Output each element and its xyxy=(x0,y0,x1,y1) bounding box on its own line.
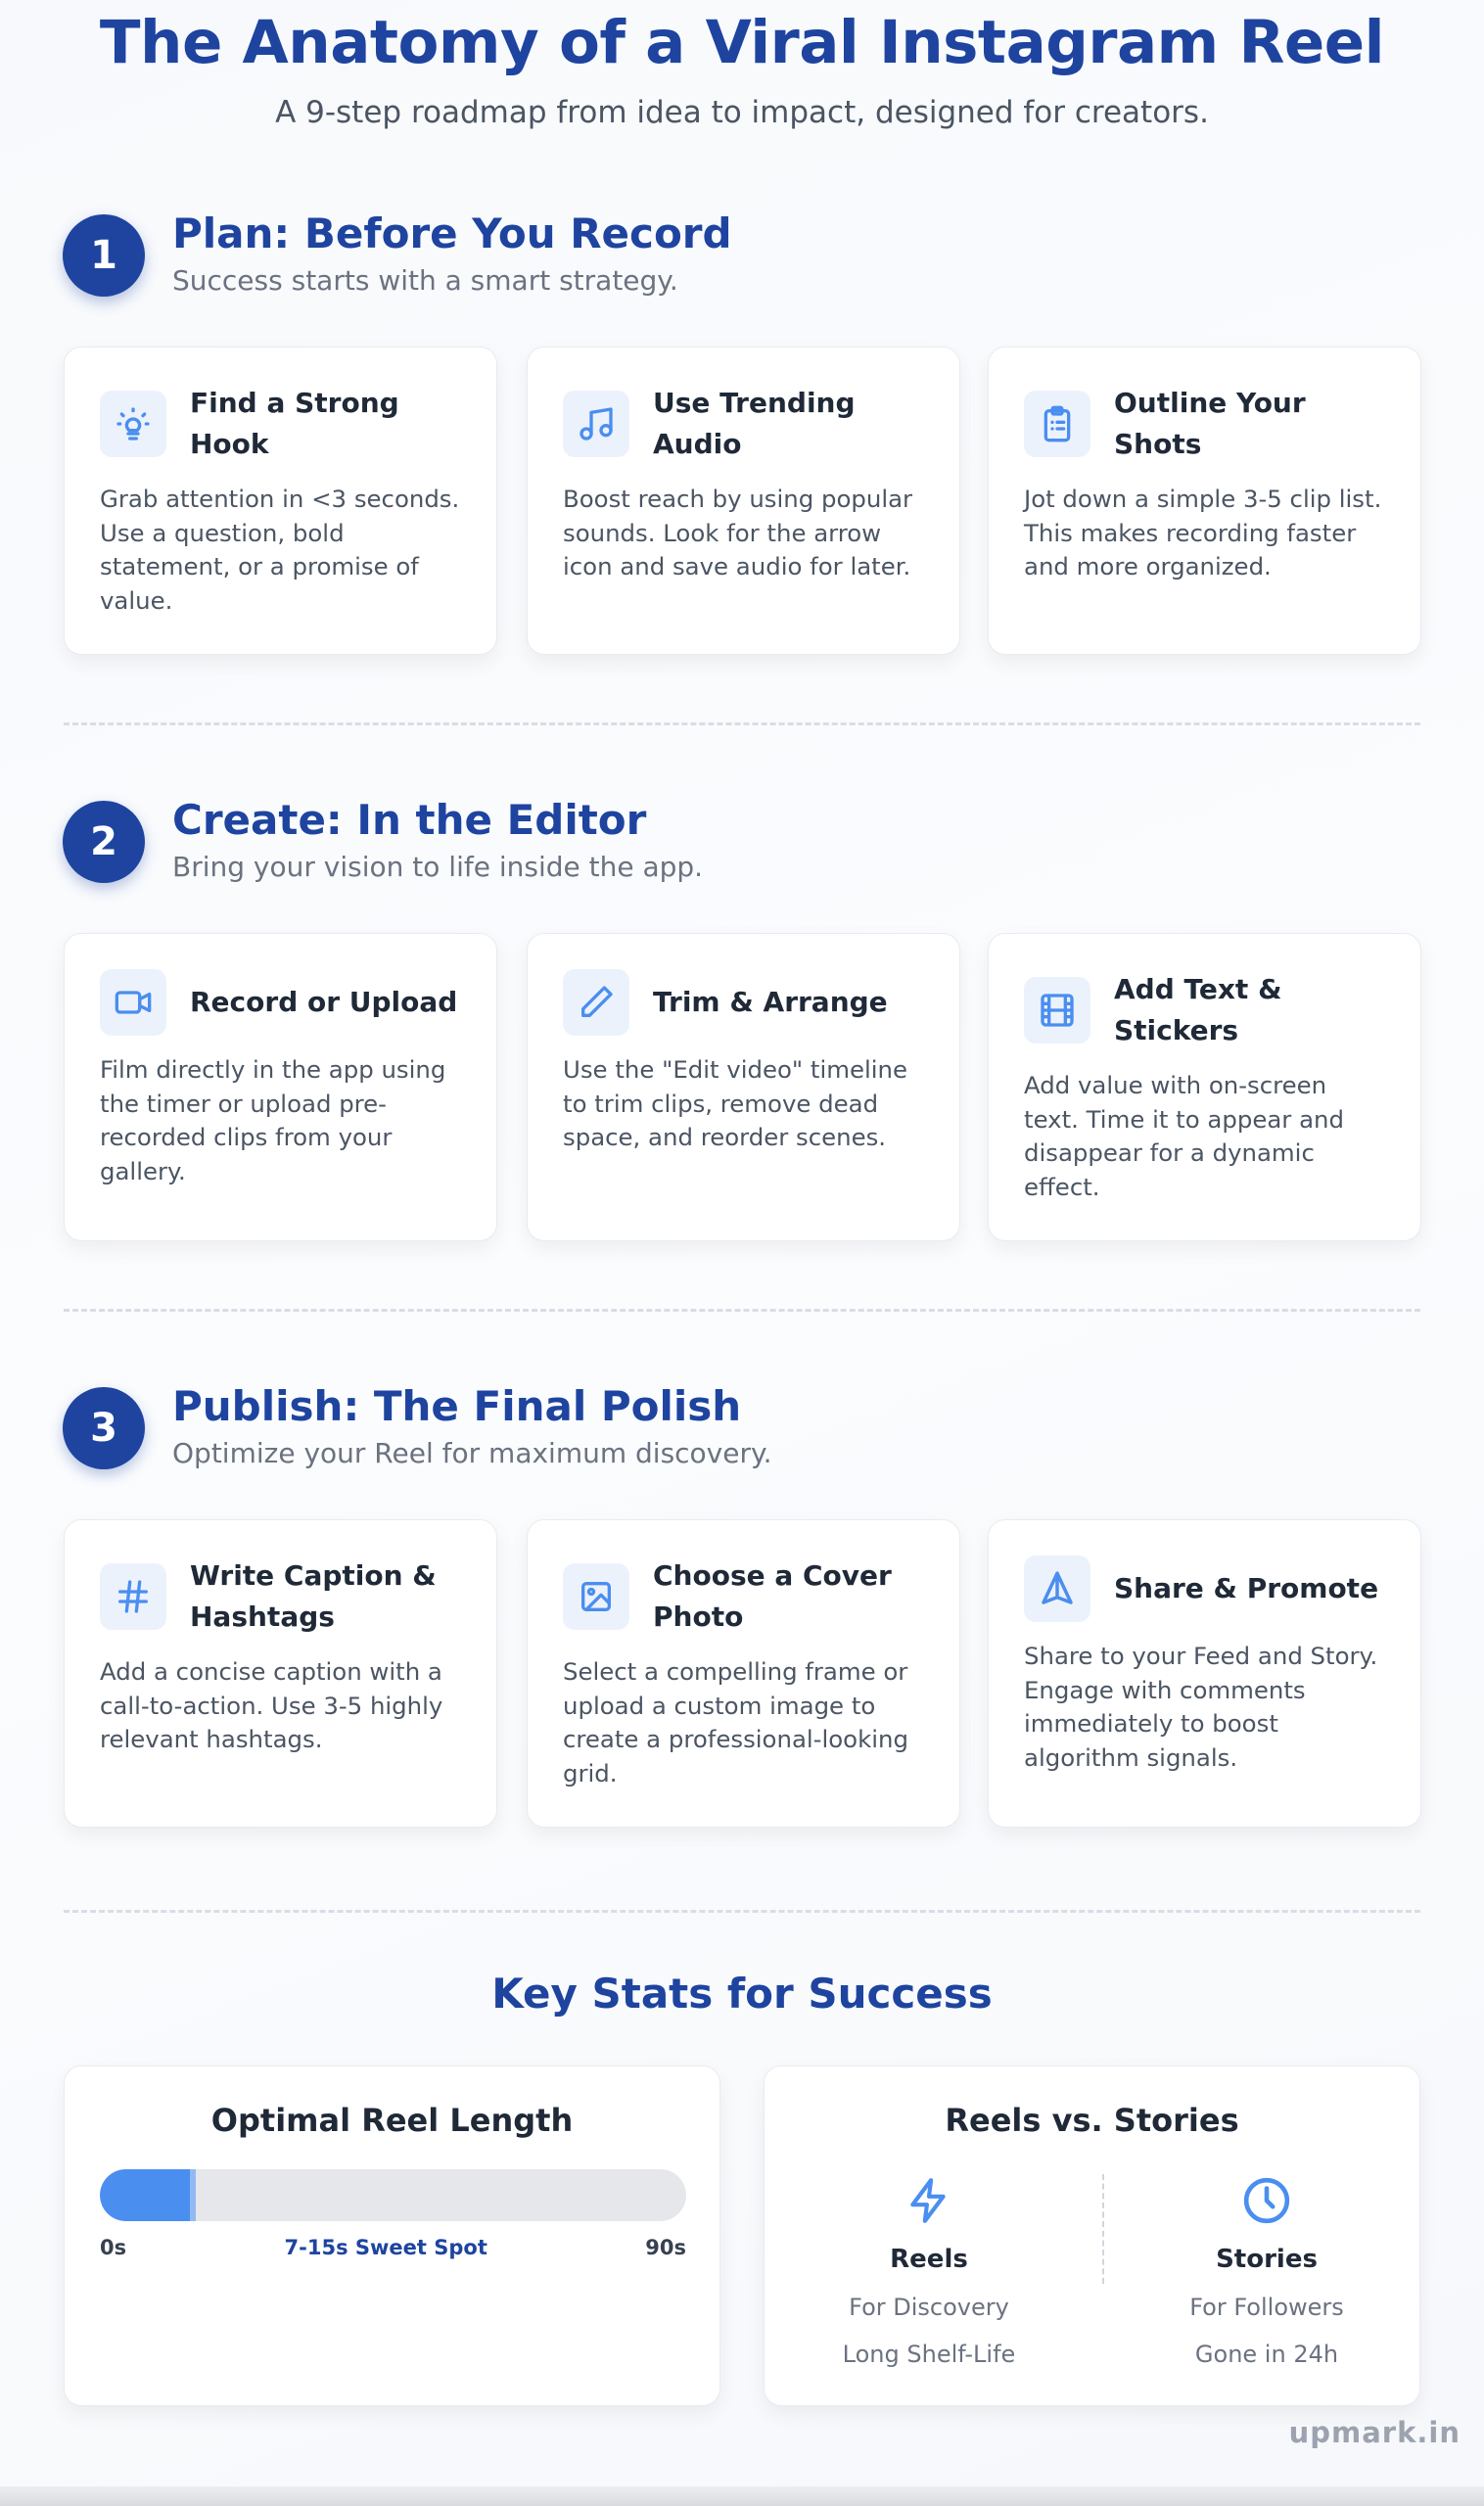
icon: clipboard xyxy=(1024,391,1090,457)
card: record or upload: Film directly in the app using the timer or upload pre-recorded clips from your gallery. xyxy=(100,1055,445,1184)
column: stories: Gone in 24h xyxy=(1195,2341,1338,2368)
card: trending audio: Use Trending Audio xyxy=(653,387,856,460)
column: reels: Reels xyxy=(890,2245,968,2274)
icon: send xyxy=(1024,1555,1090,1622)
card: share: Share & Promote xyxy=(1114,1572,1378,1604)
icon: music xyxy=(563,391,629,457)
card: cover: Choose a Cover Photo xyxy=(653,1559,892,1633)
icon: pencil xyxy=(563,969,629,1036)
card: cover xyxy=(527,1519,960,1828)
bar labels: 7-15s Sweet Spot xyxy=(285,2236,487,2259)
card: outline shots xyxy=(988,347,1421,655)
section heading: create: Create: In the Editor xyxy=(172,796,646,844)
card: trim xyxy=(527,933,960,1241)
section heading: create xyxy=(172,796,703,883)
card: find a strong hook: Grab attention in <3 seconds. Use a question, bold statement, or a promise of value. xyxy=(100,485,459,615)
column: reels: Long Shelf-Life xyxy=(843,2341,1015,2368)
section heading: plan xyxy=(172,209,732,297)
card: find a strong hook xyxy=(64,347,497,655)
step badge 2: 2 xyxy=(90,819,117,864)
heading: key stats: Key Stats for Success xyxy=(491,1970,993,2018)
icon: hash xyxy=(100,1563,166,1630)
card: cover: Select a compelling frame or upload a custom image to create a professional-looking grid. xyxy=(563,1657,908,1787)
card: share: Share to your Feed and Story. Engage with comments immediately to boost algorithm signals. xyxy=(1024,1642,1377,1772)
step badge 1 xyxy=(63,214,145,297)
card: outline shots: Outline Your Shots xyxy=(1114,387,1306,460)
bar labels xyxy=(100,2236,686,2259)
column: stories: Stories xyxy=(1216,2245,1318,2274)
stat card: reel length xyxy=(64,2065,720,2406)
column: stories: For Followers xyxy=(1189,2294,1344,2321)
column: reels xyxy=(843,2178,1015,2368)
stat card: reel length: Optimal Reel Length xyxy=(211,2102,573,2139)
progress bar xyxy=(100,2169,686,2221)
bar labels: 0s xyxy=(100,2236,126,2259)
section heading: publish: Publish: The Final Polish xyxy=(172,1382,741,1430)
step badge 3: 3 xyxy=(90,1406,117,1451)
card: text & stickers: text. Time it to appear and disappear for a dynamic effect. xyxy=(1024,1104,1344,1200)
column: stories xyxy=(1189,2177,1344,2368)
card: outline shots: Jot down a simple 3-5 clip list. This makes recording faster and more organized. xyxy=(1024,485,1381,580)
section heading: plan: Success starts with a smart strategy. xyxy=(172,264,678,297)
icon: film xyxy=(1024,977,1090,1044)
card: text & stickers: Add Text & Stickers xyxy=(1114,973,1282,1046)
icon: lightbulb xyxy=(100,391,166,457)
card: caption xyxy=(64,1519,497,1828)
column: reels: For Discovery xyxy=(849,2294,1009,2321)
step badge 2 xyxy=(63,801,145,883)
card: share xyxy=(988,1519,1421,1828)
icon: lightning xyxy=(910,2178,946,2223)
section heading: plan: Plan: Before You Record xyxy=(172,209,732,257)
stat card: reels vs stories xyxy=(764,2065,1420,2406)
card: caption: Add a concise caption with a call-to-action. Use 3-5 highly relevant hashtags. xyxy=(100,1657,442,1753)
stat card: reels vs stories: Reels vs. Stories xyxy=(945,2102,1239,2139)
icon: clock xyxy=(1243,2177,1290,2224)
card: caption: Write Caption & Hashtags xyxy=(190,1559,437,1633)
section heading: create: Bring your vision to life inside the app. xyxy=(172,851,703,883)
step badge 1: 1 xyxy=(90,233,117,278)
icon: video xyxy=(100,969,166,1036)
title: The Anatomy of a Viral Instagram Reel xyxy=(100,8,1384,77)
section heading: publish: Optimize your Reel for maximum discovery. xyxy=(172,1437,771,1469)
card: record or upload xyxy=(64,933,497,1241)
card: record or upload: Record or Upload xyxy=(190,986,457,1018)
card: text & stickers xyxy=(988,933,1421,1241)
step badge 3 xyxy=(63,1387,145,1469)
card: find a strong hook: Find a Strong Hook xyxy=(190,387,399,460)
subtitle: A 9-step roadmap from idea to impact, designed for creators. xyxy=(275,95,1209,130)
bar labels: 90s xyxy=(645,2236,686,2259)
section heading: publish xyxy=(172,1382,771,1469)
card: trending audio: Boost reach by using popular sounds. Look for the arrow icon and save audio for later. xyxy=(563,485,912,580)
card: trending audio xyxy=(527,347,960,655)
card: trim: Use the "Edit video" timeline to trim clips, remove dead space, and reorder scenes. xyxy=(563,1055,907,1151)
icon: image xyxy=(563,1563,629,1630)
watermark: upmark.in xyxy=(1289,2416,1461,2449)
card: text & stickers: Add value with on-screen xyxy=(1024,1071,1326,1099)
card: trim: Trim & Arrange xyxy=(653,986,888,1018)
